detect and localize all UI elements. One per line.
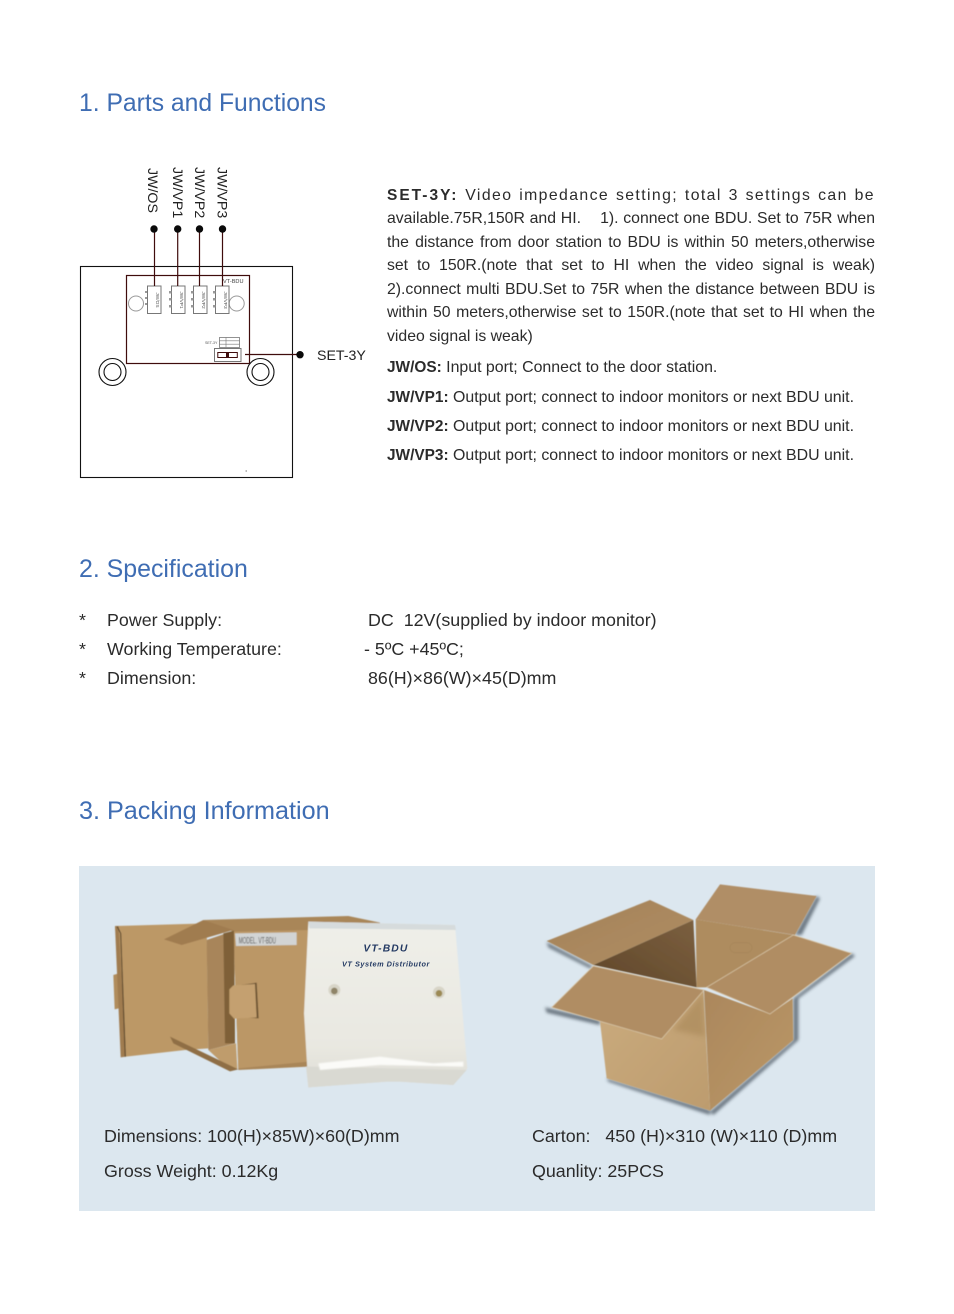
description: JW/VP1: JW/VP1: Output port; connect to indoor monitors or next BDU unit. <box>387 389 854 406</box>
port labels: JW/OS <box>144 168 160 213</box>
heading: packing information: 3. Packing Information <box>79 797 330 825</box>
specification list: DC 12V(supplied by indoor monitor) <box>368 610 657 630</box>
panel: packing <box>79 866 875 1211</box>
set table <box>205 338 240 348</box>
specification list: 86(H)×86(W)×45(D)mm <box>368 668 556 688</box>
white distributor unit <box>304 922 467 1087</box>
description: SET-3Y: set to 150R.(note that set to HI when the video signal is weak) <box>387 257 875 274</box>
jumper switch <box>214 348 241 362</box>
caption: inner box weight: Gross Weight: 0.12Kg <box>104 1161 278 1181</box>
photo: small carton and VT-BDU unit <box>113 916 467 1087</box>
port labels <box>144 167 230 218</box>
circuit board <box>126 276 250 364</box>
heading: parts and functions: 1. Parts and Functions <box>79 90 326 117</box>
description: SET-3Y: 2).connect multi BDU.Set to 75R when the distance between BDU is <box>387 281 875 298</box>
photo: open shipping carton <box>545 884 855 1115</box>
carton <box>113 916 380 1071</box>
leader lines <box>154 229 300 354</box>
outer enclosure <box>80 266 292 478</box>
description: JW/OS: JW/OS: Input port; Connect to the door station. <box>387 359 717 376</box>
port labels: JW/VP3 <box>214 167 230 218</box>
description: SET-3Y: within 50 meters,otherwise set to 150R.(note that set to HI when the <box>387 304 875 321</box>
specification list: Power Supply: <box>107 610 222 630</box>
board circles <box>128 296 244 311</box>
port labels: JW/VP2 <box>191 167 207 218</box>
carton label: MODEL. VT-BDU <box>239 935 276 945</box>
unit text: VT-BDU <box>363 944 408 955</box>
description: SET-3Y: SET-3Y: Video impedance setting; total 3 settings can be <box>387 187 875 204</box>
description: SET-3Y: available.75R,150R and HI. 1). connect one BDU. Set to 75R when <box>387 210 875 227</box>
specification list <box>79 610 657 688</box>
heading: specification: 2. Specification <box>79 555 248 583</box>
port connectors: JW/OS <box>154 292 160 308</box>
shadows <box>545 896 855 1115</box>
description: SET-3Y: the distance from door station to BDU is within 50 meters,otherwise <box>387 234 875 251</box>
specification list: * <box>79 610 86 630</box>
specification list: Working Temperature: <box>107 639 282 659</box>
port labels: JW/VP1 <box>169 167 185 218</box>
set-3y label: SET-3Y <box>317 348 366 364</box>
leader dots <box>150 225 304 358</box>
body faces <box>600 990 710 1111</box>
set table: SET-3Y <box>205 341 218 345</box>
description: SET-3Y <box>387 187 875 345</box>
description: JW/VP2: JW/VP2: Output port; connect to indoor monitors or next BDU unit. <box>387 418 854 435</box>
caption: carton quantity: Quanlity: 25PCS <box>532 1161 664 1181</box>
port connectors: JW/VP2 <box>200 291 206 309</box>
specification list: - 5ºC +45ºC; <box>364 639 464 659</box>
description: JW/VP3: JW/VP3: Output port; connect to indoor monitors or next BDU unit. <box>387 447 854 464</box>
port connectors <box>145 286 229 314</box>
board label: VT-BDU <box>223 279 244 285</box>
specification list: * <box>79 639 86 659</box>
diagram: wiring of VT-BDU unit <box>80 167 366 478</box>
speck <box>246 470 247 472</box>
unit text: VT System Distributor <box>342 959 430 968</box>
specification list: * <box>79 668 86 688</box>
port connectors: JW/VP3 <box>222 291 228 309</box>
unit text <box>342 944 430 968</box>
port connectors: JW/VP1 <box>178 291 184 309</box>
caption: inner box dimensions: Dimensions: 100(H)×85W)×60(D)mm <box>104 1126 400 1146</box>
caption: carton dimensions: Carton: 450 (H)×310 (W)×110 (D)mm <box>532 1126 837 1146</box>
flaps and walls <box>547 900 693 965</box>
description: SET-3Y: video signal is weak) <box>387 328 533 345</box>
mounting holes <box>99 358 274 386</box>
specification list: Dimension: <box>107 668 196 688</box>
carton label <box>235 932 297 946</box>
